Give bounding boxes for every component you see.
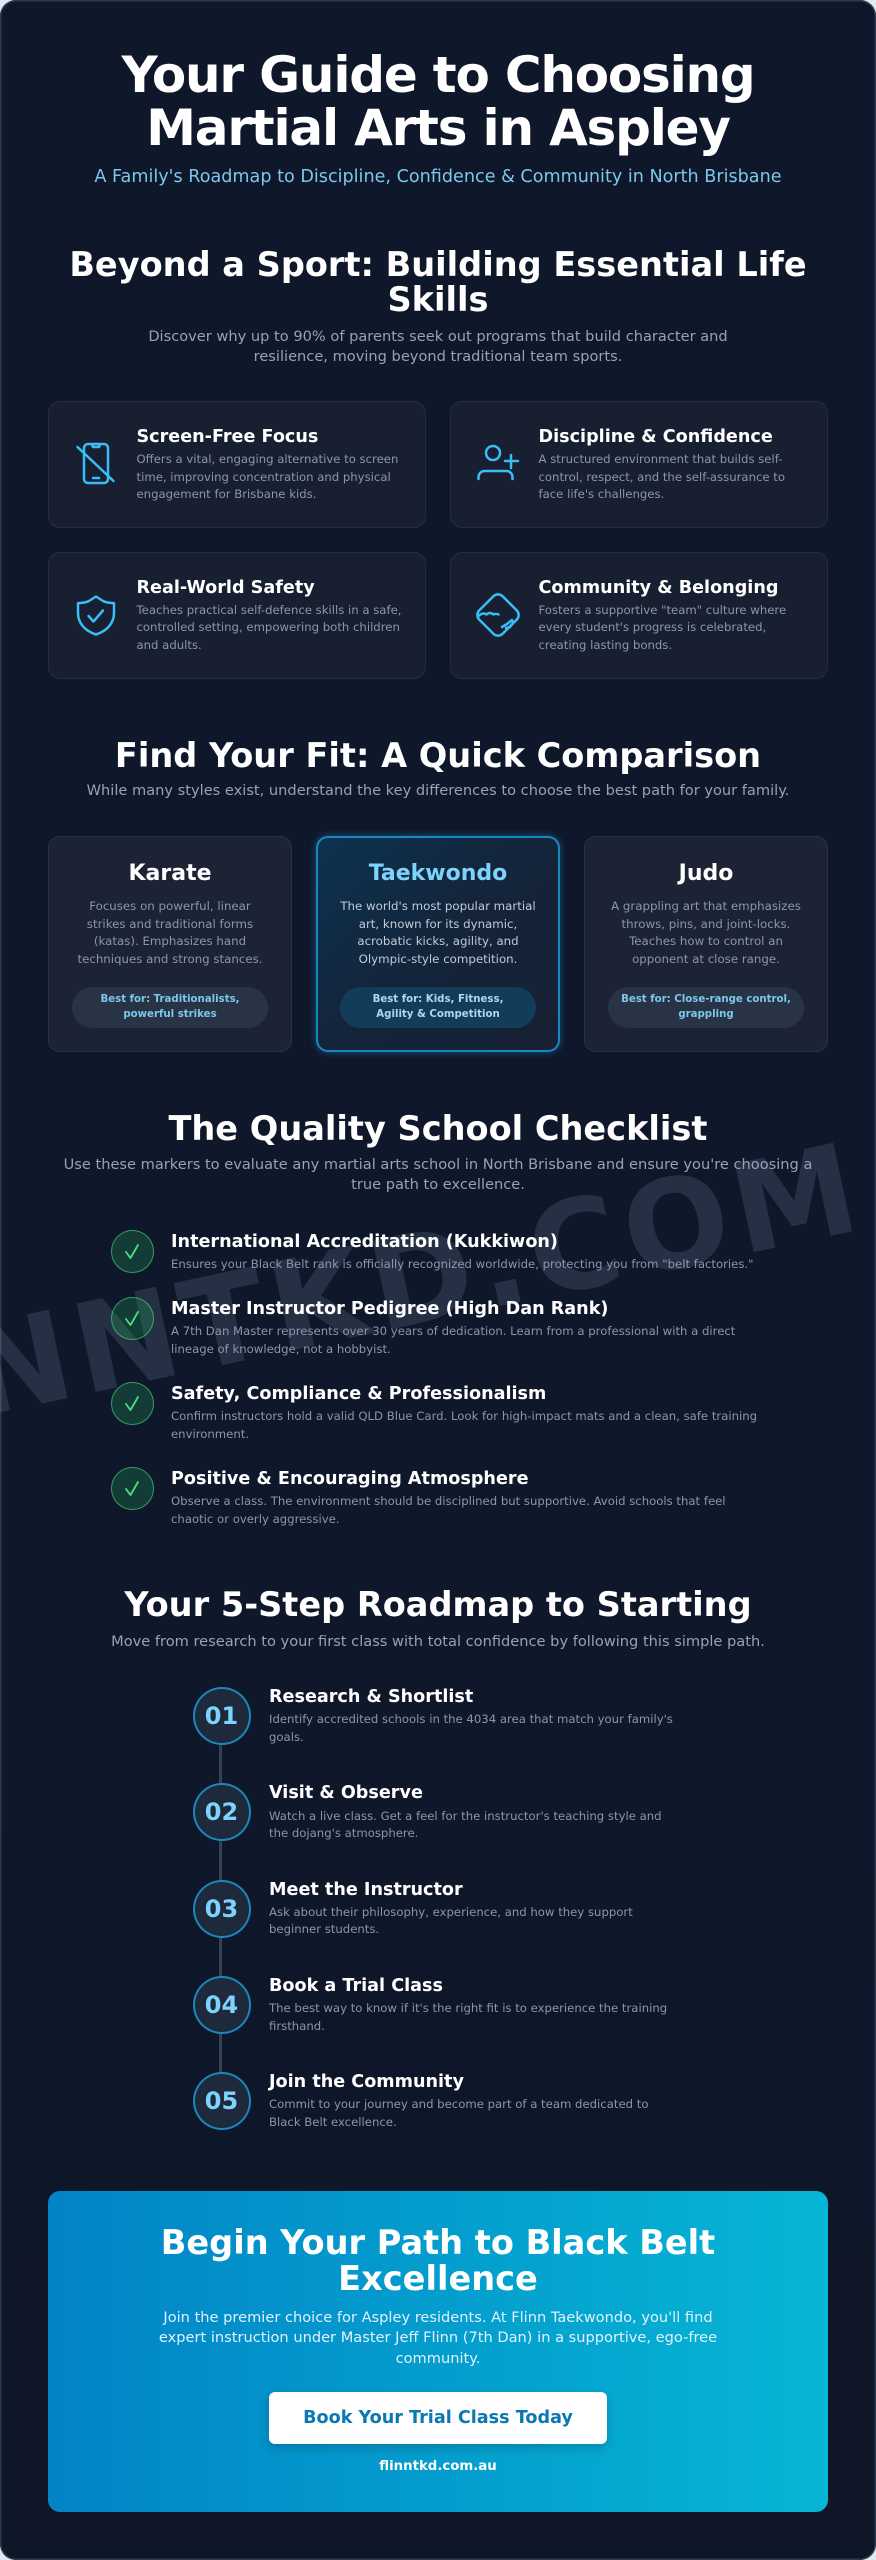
text: karate: Focuses on powerful, linear [89,899,251,913]
panel: comparison [48,736,828,1057]
connector [219,1938,222,1976]
title: step 3: Meet the Instructor [269,1880,463,1900]
text: taekwondo: art, known for its dynamic, [359,916,517,930]
badge: karate best for: powerful strikes [123,1008,217,1020]
text: judo: A grappling art that emphasizes [611,899,801,913]
title: accreditation: International Accreditation (Kukkiwon) [171,1232,558,1252]
checklist item: accreditation [111,1230,754,1273]
number 05: 05 [205,2087,238,2115]
number 02 [192,1783,250,1841]
title: screen-free focus: Screen-Free Focus [136,427,318,447]
subtitle: A Family's Roadmap to Discipline, Confidence & Community in North Brisbane [94,167,782,187]
text: community and belonging: creating lasting bonds. [538,638,672,652]
badge: taekwondo best for: Agility & Competition [376,1008,500,1020]
title: instructor pedigree: Master Instructor Pedigree (High Dan Rank) [171,1299,608,1319]
text: safety: environment. [171,1427,249,1441]
panel: call to action [48,2191,828,2512]
text: screen-free focus [136,452,398,501]
text: judo: throws, pins, and joint-locks. [622,916,790,930]
number 03: 03 [205,1895,238,1923]
text: atmosphere: chaotic or overly aggressive. [171,1512,340,1526]
number 01 [192,1687,250,1745]
text: judo: Teaches how to control an [629,934,783,948]
text: call to action [159,2309,717,2367]
title: step 4: Book a Trial Class [269,1976,443,1996]
text: step 5: Black Belt excellence. [269,2115,397,2129]
text: call to action: community. [396,2350,480,2367]
number 03 [192,1880,250,1938]
text: karate [77,899,263,966]
title: step 1: Research & Shortlist [269,1687,473,1707]
step 2 [193,1783,662,1880]
card: screen-free focus [48,401,426,528]
heading: checklist: The Quality School Checklist [168,1109,707,1148]
icon: check [110,1230,154,1272]
heading: life skills [69,245,807,319]
text: community and belonging: every student's progress is celebrated, [538,620,766,634]
checklist item: atmosphere [111,1467,726,1526]
badge: judo best for: grappling [678,1008,734,1020]
text: instructor pedigree [171,1324,736,1356]
step 1 [193,1687,673,1783]
badge: taekwondo best for: Best for: Kids, Fitness, [373,994,503,1005]
text: community and belonging [538,602,786,652]
button: book trial class [269,2392,607,2444]
text: step 3: beginner students. [269,1922,379,1936]
text: safety: Confirm instructors hold a valid QLD Blue Card. Look for high-impact mats and a clean, safe training [171,1409,757,1423]
text: community and belonging: Fosters a supportive "team" culture where [538,602,786,616]
connector [219,1841,222,1880]
panel: checklist [64,1109,812,1526]
title: safety: Safety, Compliance & Professionalism [171,1384,546,1404]
title: Martial Arts in Aspley [146,99,730,157]
text: call to action: expert instruction under Master Jeff Flinn (7th Dan) in a supportive, ego-free [159,2329,717,2346]
text: taekwondo: Olympic-style competition. [359,952,517,966]
number 01: 01 [205,1702,238,1730]
text: life skills intro: Discover why up to 90% of parents seek out programs that build character and [148,328,728,344]
number 04 [192,1976,250,2034]
text: discipline and confidence: control, respect, and the self-assurance to [538,470,785,484]
card: karate [48,836,292,1052]
title: step 5: Join the Community [269,2072,464,2092]
number 04: 04 [205,1991,238,2019]
heading: life skills: Beyond a Sport: Building Essential Life [69,245,807,284]
text: real-world safety [136,602,401,652]
text: taekwondo: acrobatic kicks, agility, and [357,934,519,948]
checklist item: instructor pedigree [111,1297,736,1356]
number 05 [192,2072,250,2130]
text: roadmap intro: Move from research to your first class with total confidence by following this simple path. [111,1633,765,1650]
text: karate: (katas). Emphasizes hand [94,934,246,948]
step 4 [193,1976,667,2072]
text: atmosphere [171,1494,726,1526]
text: real-world safety: controlled setting, empowering both children [136,620,400,634]
icon: crossed-out phone [76,442,115,484]
heading: comparison: Find Your Fit: A Quick Comparison [115,736,761,774]
card: real-world safety [48,552,426,678]
title: real-world safety: Real-World Safety [136,578,315,598]
text: step 1: goals. [269,1730,304,1744]
text: instructor pedigree: lineage of knowledge, not a hobbyist. [171,1342,391,1356]
panel: life skills [48,245,828,679]
text: comparison intro: While many styles exist, understand the key differences to choose the best path for your family. [87,782,789,799]
text: discipline and confidence: face life's challenges. [538,487,664,501]
text: step 5 [269,2097,648,2129]
text: real-world safety: and adults. [136,638,202,652]
website link: flinntkd.com.au [379,2459,497,2474]
icon: check [110,1382,154,1424]
icon: check [110,1296,154,1340]
title: step 2: Visit & Observe [269,1783,423,1803]
text: real-world safety: Teaches practical self-defence skills in a safe, [136,602,401,616]
text: judo [611,899,801,966]
title [121,46,755,157]
title: taekwondo: Taekwondo [369,861,507,886]
step 3 [193,1880,633,1976]
badge: karate best for: Best for: Traditionalists, [100,994,240,1005]
panel: roadmap [111,1584,765,2130]
text: life skills intro [148,328,728,365]
text: checklist intro [64,1156,812,1193]
text: safety [171,1409,757,1441]
title: Your Guide to Choosing [121,46,755,104]
text: checklist intro: true path to excellence. [351,1176,525,1193]
text: instructor pedigree: A 7th Dan Master represents over 30 years of dedication. Learn from a professional with a direct [171,1324,735,1338]
text: step 3: Ask about their philosophy, experience, and how they support [269,1905,633,1919]
heading: life skills: Skills [387,280,489,319]
header [94,46,782,187]
title: community and belonging: Community & Belonging [538,578,778,598]
step 5 [193,2072,648,2130]
icon: community diamond [476,593,520,637]
text: step 3 [269,1905,633,1936]
text: step 1 [269,1712,673,1744]
badge: karate best for [72,987,268,1028]
text: step 4: firsthand. [269,2019,325,2033]
heading: call to action: Excellence [338,2259,538,2298]
title: atmosphere: Positive & Encouraging Atmosphere [171,1469,529,1489]
icon: check [110,1466,154,1510]
text: life skills intro: resilience, moving beyond traditional team sports. [254,348,622,365]
card: discipline and confidence [450,401,828,528]
text: step 4 [268,2001,667,2033]
text: step 1: Identify accredited schools in the 4034 area that match your family's [269,1712,673,1726]
icon: person with plus [477,444,520,480]
text: checklist intro: Use these markers to evaluate any martial arts school in North Brisbane and ensure you're choosing a [64,1156,812,1173]
card: judo [584,836,828,1052]
text: step 5: Commit to your journey and become part of a team dedicated to [269,2097,648,2111]
text: accreditation: Ensures your Black Belt rank is officially recognized worldwide, protecting you from "belt factories." [171,1257,754,1271]
connector [219,1745,222,1783]
heading: call to action: Begin Your Path to Black Belt [161,2223,715,2262]
text: screen-free focus: engagement for Brisbane kids. [136,487,316,501]
text: step 2: Watch a live class. Get a feel for the instructor's teaching style and [269,1809,662,1823]
text: step 2 [269,1809,662,1840]
checklist item: safety [111,1382,757,1441]
icon: shield with check [76,595,116,636]
text: discipline and confidence: A structured environment that builds self- [538,452,782,466]
title: judo: Judo [679,861,733,886]
text: screen-free focus: Offers a vital, engaging alternative to screen [136,452,398,466]
text: taekwondo [340,899,536,966]
title: karate: Karate [128,861,212,886]
text: step 4: The best way to know if it's the right fit is to experience the training [269,2001,667,2015]
text: taekwondo: The world's most popular martial [340,899,536,913]
connector [219,2034,222,2072]
heading: roadmap: Your 5-Step Roadmap to Starting [124,1584,752,1624]
text: call to action: Join the premier choice for Aspley residents. At Flinn Taekwondo, you'll find [163,2309,713,2326]
text: screen-free focus: time, improving concentration and physical [136,470,391,484]
text: karate: strikes and traditional forms [87,916,253,930]
text: judo: opponent at close range. [632,952,780,966]
title: discipline and confidence: Discipline & Confidence [538,427,773,447]
number 02: 02 [205,1798,238,1826]
text: atmosphere: Observe a class. The environment should be disciplined but supportive. Avoid schools that feel [171,1494,726,1508]
text: step 2: the dojang's atmosphere. [269,1826,418,1840]
card: community and belonging [450,552,828,678]
badge: taekwondo best for [340,987,536,1028]
card: taekwondo highlighted [316,836,560,1052]
text: karate: techniques and strong stances. [77,952,263,966]
heading: call to action [161,2223,715,2298]
button: book trial class: Book Your Trial Class Today [303,2408,573,2428]
badge: judo best for [608,987,804,1028]
badge: judo best for: Best for: Close-range control, [621,994,791,1005]
text: discipline and confidence [538,452,785,501]
